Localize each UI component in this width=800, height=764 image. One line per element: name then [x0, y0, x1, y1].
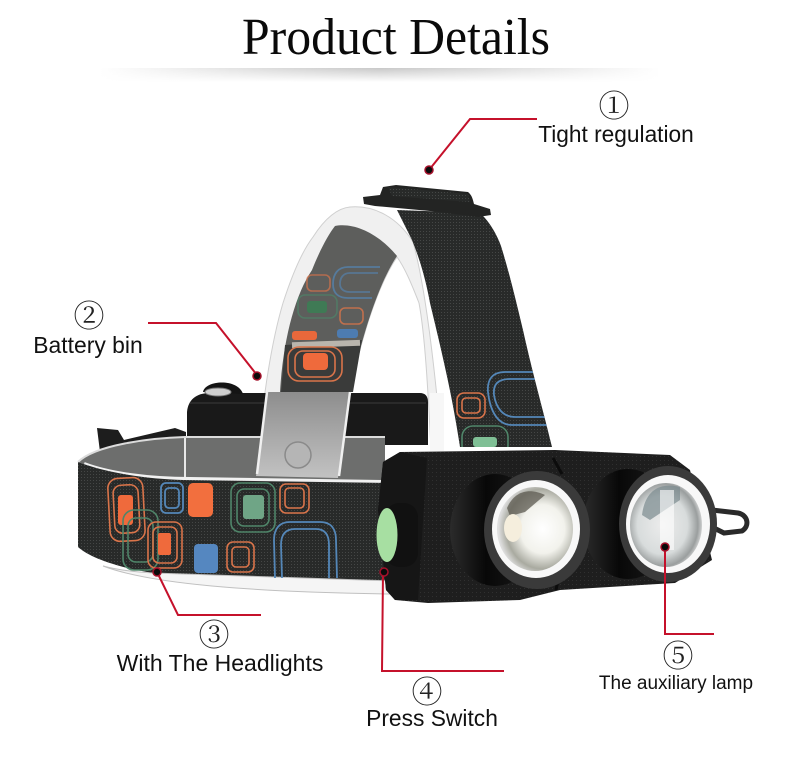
- callout 5: the auxiliary lamp: ⑤: [662, 631, 694, 676]
- callout 1: tight regulation: [425, 81, 694, 174]
- clear band: back arch: [258, 207, 442, 460]
- callout 3: with the headlights: [117, 568, 323, 676]
- title: Product Details: [242, 9, 550, 66]
- callout 4: press switch: ④: [412, 667, 442, 712]
- lamp rear hook: [712, 510, 747, 533]
- lens 1: main lamp: [450, 471, 590, 589]
- callout 4: press switch: Press Switch: [366, 705, 498, 731]
- callout 3: with the headlights: ③: [198, 610, 230, 655]
- head strap with patterns: [78, 462, 392, 594]
- battery bin: [187, 382, 428, 445]
- rear clips: [97, 428, 186, 452]
- green switch button: [376, 503, 418, 567]
- top strap: [363, 185, 552, 456]
- callout 1: tight regulation: Tight regulation: [538, 121, 694, 147]
- callout 5: the auxiliary lamp: The auxiliary lamp: [599, 673, 753, 694]
- callout 3: with the headlights: With The Headlights: [117, 650, 323, 676]
- clear band: front lower panel: [256, 392, 444, 478]
- lower clear rim: [103, 566, 392, 594]
- inner of head ring: [78, 437, 385, 485]
- lens 2: auxiliary lamp: [583, 466, 717, 582]
- strap seen through clear band: [280, 225, 397, 392]
- strap buckle: [363, 185, 491, 217]
- callout 2: battery bin: [33, 291, 261, 380]
- callout 2: battery bin: Battery bin: [33, 332, 143, 358]
- callout 1: tight regulation: ①: [598, 81, 630, 126]
- title shadow: [100, 68, 660, 82]
- callout 4: press switch: [366, 568, 504, 731]
- lamp housing: [378, 450, 712, 603]
- callout 2: battery bin: ②: [74, 291, 104, 336]
- callout 5: the auxiliary lamp: [599, 543, 753, 694]
- headlamp product: [78, 185, 747, 603]
